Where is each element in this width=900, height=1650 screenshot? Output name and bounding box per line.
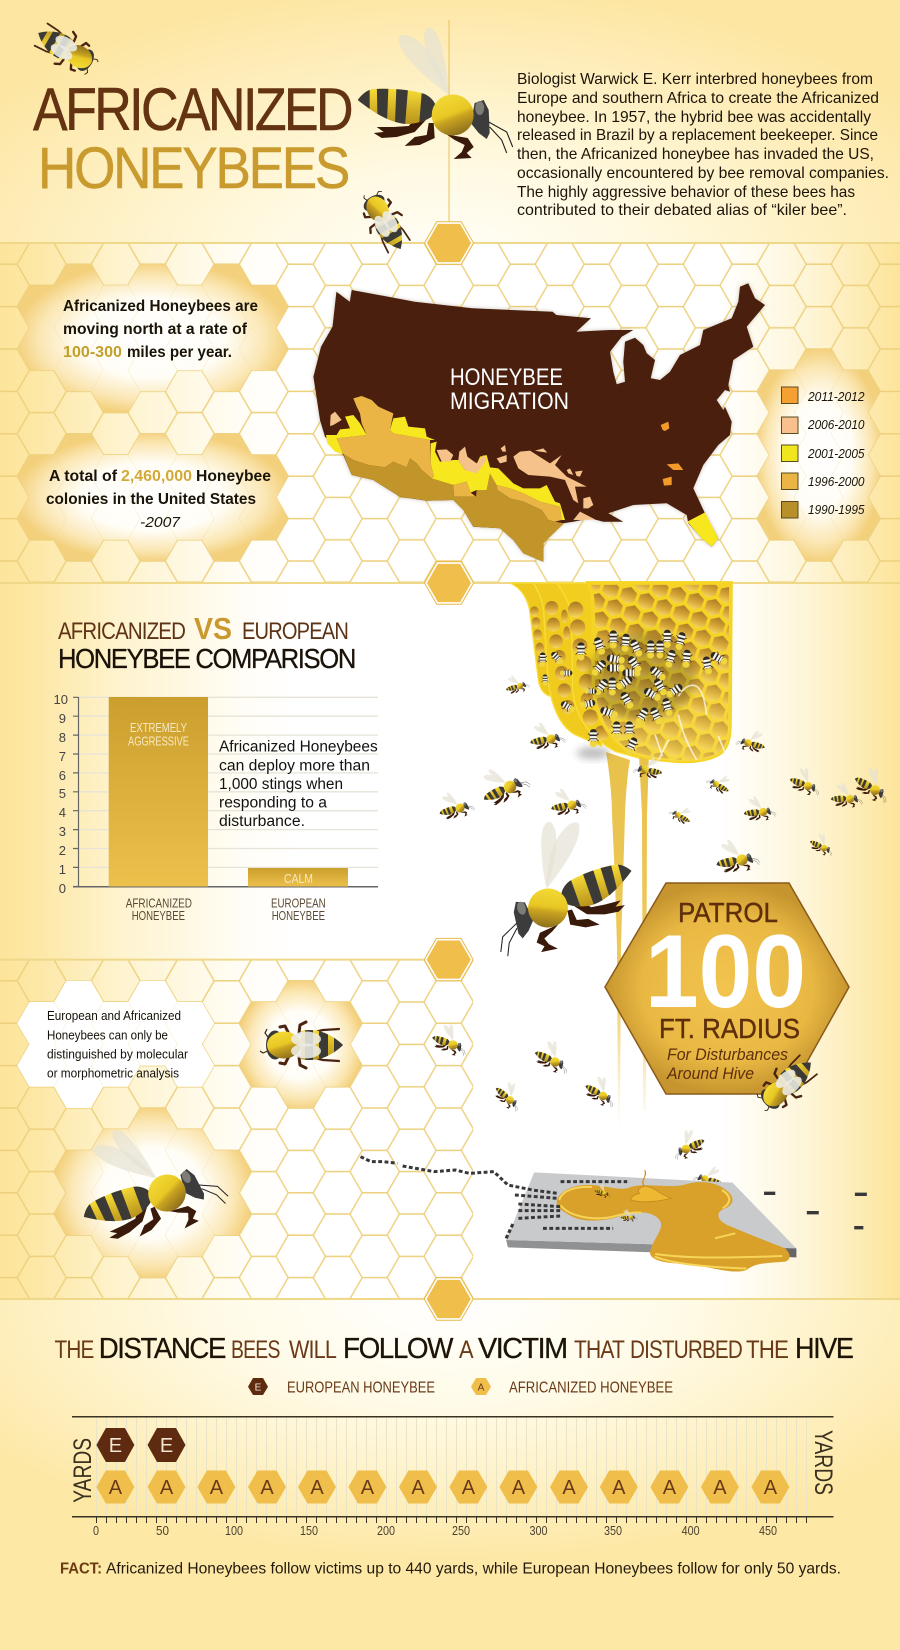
patrol badge: Around Hive bbox=[666, 1064, 754, 1083]
panel: colonies total: 2,460,000 bbox=[121, 468, 192, 485]
panel: migration rate: miles per year. bbox=[127, 344, 232, 361]
section hexagon badge: identification bbox=[424, 938, 473, 981]
map band: 2006-2010 bbox=[330, 412, 595, 520]
intro paragraph: released in Brazil by a replacement beekeeper. Since bbox=[517, 127, 878, 144]
distance heading: VICTIM bbox=[478, 1333, 567, 1365]
map band: 1996-2000 bbox=[337, 396, 562, 522]
comparison heading: AFRICANIZED bbox=[58, 618, 186, 645]
bar: Africanized: EXTREMELY bbox=[130, 721, 187, 735]
bar chart: aggression: 5 bbox=[59, 786, 66, 801]
bar chart: aggression: AFRICANIZED bbox=[126, 897, 192, 911]
map: honeybee migration: HONEYBEE bbox=[450, 364, 563, 391]
section hexagon badge: migration bbox=[424, 222, 474, 264]
legend: distance chart: A bbox=[478, 1382, 485, 1394]
intro paragraph bbox=[517, 71, 889, 219]
map band: Florida 2001-2005 bbox=[687, 512, 718, 547]
European hexagons: E bbox=[109, 1435, 122, 1457]
intro paragraph: Biologist Warwick E. Kerr interbred honeybees from bbox=[517, 71, 873, 88]
panel: identification text: Honeybees can only be bbox=[47, 1028, 168, 1042]
panel: map legend bbox=[755, 348, 883, 562]
Africanized hexagons: A bbox=[109, 1477, 123, 1499]
Africanized hexagons: A bbox=[713, 1477, 727, 1499]
hive honeycomb bbox=[510, 583, 731, 761]
distance heading: THE bbox=[746, 1336, 788, 1364]
honey drips bbox=[606, 752, 649, 1128]
distance heading: BEES bbox=[231, 1336, 280, 1364]
map band: 2001-2005 bbox=[326, 415, 565, 520]
scattered ants bbox=[764, 1193, 867, 1228]
distance heading: THAT bbox=[574, 1336, 625, 1364]
comparison heading: HONEYBEE COMPARISON bbox=[58, 643, 355, 674]
patrol badge: FT. RADIUS bbox=[659, 1013, 800, 1044]
panel: identification text: or morphometric analysis bbox=[47, 1066, 179, 1080]
Africanized hexagons: A bbox=[512, 1477, 526, 1499]
honeycomb: migration section bbox=[0, 243, 900, 583]
distance heading: A bbox=[459, 1336, 474, 1364]
title: AFRICANIZED bbox=[33, 76, 352, 143]
fact statement: FACT: bbox=[60, 1560, 102, 1577]
patrol badge: PATROL bbox=[678, 897, 778, 928]
bar chart: aggression: 6 bbox=[59, 768, 66, 783]
bar: European: CALM bbox=[284, 872, 313, 886]
intro paragraph: honeybee. In 1957, the hybrid bee was accidentally bbox=[517, 109, 871, 126]
icon: bee under title bbox=[353, 184, 417, 260]
legend: distance chart: EUROPEAN HONEYBEE bbox=[287, 1380, 435, 1397]
distance heading: FOLLOW bbox=[343, 1333, 454, 1365]
Africanized hexagons: A bbox=[612, 1477, 626, 1499]
legend: distance chart: E bbox=[255, 1382, 262, 1394]
comparison heading: VS bbox=[194, 611, 232, 646]
honey puddle bbox=[557, 1170, 790, 1272]
panel: map legend: 2011-2012 bbox=[807, 389, 865, 404]
honeycomb: lower left section bbox=[0, 960, 473, 1299]
panel: identification text: European and Africanized bbox=[47, 1009, 181, 1023]
Africanized hexagons: A bbox=[160, 1477, 174, 1499]
panel: migration rate bbox=[15, 262, 290, 414]
map band: 1990-1995 bbox=[343, 454, 564, 562]
comb layer 1 bbox=[510, 583, 555, 696]
spilled honey tray with ants bbox=[361, 1157, 867, 1272]
fact statement: Africanized Honeybees follow victims up to 440 yards, while European Honeybees follow for only 50 yards. bbox=[106, 1560, 841, 1577]
distance timeline chart bbox=[69, 1417, 837, 1538]
bar: European bbox=[248, 868, 348, 886]
axis labels bbox=[93, 1523, 777, 1538]
comparison heading bbox=[58, 611, 355, 674]
panel: colonies total: -2007 bbox=[140, 514, 181, 531]
Africanized hexagons: A bbox=[411, 1477, 425, 1499]
map outline: United States bbox=[313, 283, 765, 562]
intro paragraph: then, the Africanized honeybee has invaded the US, bbox=[517, 146, 874, 163]
panel: map legend: 2001-2005 bbox=[807, 446, 865, 461]
Africanized hexagons: A bbox=[663, 1477, 677, 1499]
axis labels: 450 bbox=[759, 1523, 777, 1538]
Africanized hexagons: A bbox=[562, 1477, 576, 1499]
axis labels: 150 bbox=[300, 1523, 318, 1538]
callout: stings: 1,000 stings when bbox=[219, 776, 343, 793]
bar chart: aggression: 1 bbox=[59, 862, 66, 877]
swarm of bees on comb bbox=[538, 630, 730, 757]
patrol badge: 100 bbox=[645, 914, 806, 1030]
axis labels: 200 bbox=[377, 1523, 395, 1538]
comparison heading: EUROPEAN bbox=[242, 618, 348, 645]
panel: identification text bbox=[15, 980, 217, 1110]
intro paragraph: occasionally encountered by bee removal companies. bbox=[517, 165, 889, 182]
distance heading: DISTURBED bbox=[630, 1336, 742, 1364]
comb layer 4 front bbox=[588, 583, 731, 761]
Africanized hexagons: A bbox=[361, 1477, 375, 1499]
section hexagon badge: distance bbox=[424, 1278, 473, 1320]
panel: side-view bee bbox=[52, 1099, 253, 1280]
patrol badge: For Disturbances bbox=[667, 1045, 788, 1064]
intro paragraph: Europe and southern Africa to create the Africanized bbox=[517, 90, 879, 107]
European hexagons bbox=[96, 1428, 186, 1462]
Africanized hexagons: A bbox=[210, 1477, 224, 1499]
callout: stings: disturbance. bbox=[219, 813, 305, 830]
panel: identification text: distinguished by molecular bbox=[47, 1047, 188, 1061]
bar chart: aggression: HONEYBEE bbox=[272, 909, 325, 923]
panel: colonies total: Honeybee bbox=[196, 468, 271, 485]
callout: stings: Africanized Honeybees bbox=[219, 739, 378, 756]
bar chart: aggression: 7 bbox=[59, 749, 66, 764]
panel: migration rate: 100-300 bbox=[63, 344, 122, 361]
background: middle sections bbox=[0, 243, 900, 1299]
intro paragraph: The highly aggressive behavior of these bees has bbox=[517, 184, 855, 201]
map band: 2011-2012 bbox=[661, 422, 683, 486]
axis labels: 400 bbox=[682, 1523, 700, 1538]
ants trail bbox=[361, 1157, 627, 1238]
Africanized hexagons: A bbox=[764, 1477, 778, 1499]
Africanized hexagons bbox=[96, 1470, 789, 1504]
patrol badge bbox=[605, 883, 849, 1094]
legend: distance chart bbox=[248, 1378, 673, 1397]
bar chart: aggression: EUROPEAN bbox=[271, 897, 326, 911]
callout: stings bbox=[219, 739, 378, 830]
panel: map legend: 1996-2000 bbox=[808, 474, 865, 489]
distance heading: THE bbox=[54, 1336, 94, 1364]
divider rules bbox=[0, 243, 900, 1299]
distance heading bbox=[54, 1333, 854, 1365]
bar chart: aggression: 8 bbox=[59, 730, 66, 745]
flying bees bbox=[429, 670, 896, 1194]
axis title right: YARDS bbox=[809, 1430, 837, 1495]
axis labels: 0 bbox=[93, 1523, 99, 1538]
panel: migration rate: moving north at a rate of bbox=[63, 321, 248, 338]
bar: Africanized bbox=[109, 697, 208, 886]
comb layer 3 bbox=[557, 583, 638, 758]
bar chart: aggression: 0 bbox=[59, 881, 66, 896]
Africanized hexagons: A bbox=[310, 1477, 324, 1499]
distance heading: WILL bbox=[289, 1336, 337, 1364]
European hexagons: E bbox=[160, 1435, 173, 1457]
bar chart: aggression: 3 bbox=[59, 824, 66, 839]
bar chart: aggression: 4 bbox=[59, 805, 66, 820]
icon: bee top-left bbox=[27, 16, 105, 82]
bar chart: aggression: 10 bbox=[54, 692, 68, 707]
map: honeybee migration: MIGRATION bbox=[450, 388, 569, 415]
panel: colonies total: colonies in the United States bbox=[46, 491, 256, 508]
icon: large header bee bbox=[353, 28, 513, 159]
panel: colonies total bbox=[15, 432, 290, 562]
axis labels: 50 bbox=[156, 1523, 169, 1538]
Africanized hexagons: A bbox=[462, 1477, 476, 1499]
vertical connector line bbox=[448, 20, 450, 222]
title bbox=[33, 76, 352, 201]
distance heading: DISTANCE bbox=[99, 1333, 226, 1365]
axis title left: YARDS bbox=[69, 1438, 97, 1503]
panel: top-view bee bbox=[238, 980, 363, 1110]
callout: stings: responding to a bbox=[219, 795, 327, 812]
distance heading: HIVE bbox=[795, 1333, 854, 1365]
background: header bbox=[0, 0, 900, 243]
section hexagon badge: comparison bbox=[424, 562, 474, 604]
background: footer bbox=[0, 1299, 900, 1650]
axis labels: 100 bbox=[225, 1523, 243, 1538]
tray bbox=[506, 1172, 796, 1257]
bar chart: aggression: 9 bbox=[59, 711, 66, 726]
panel: map legend: 2006-2010 bbox=[807, 417, 865, 432]
comb layer 2 bbox=[533, 583, 602, 746]
icon: mid-page large bee bbox=[471, 803, 651, 963]
bar chart: aggression bbox=[54, 692, 378, 923]
bar chart: aggression: HONEYBEE bbox=[132, 909, 185, 923]
map shadow bbox=[313, 283, 765, 562]
bar: Africanized: AGGRESSIVE bbox=[128, 735, 189, 749]
axis labels: 350 bbox=[604, 1523, 622, 1538]
bar chart: aggression: 2 bbox=[59, 843, 66, 858]
map: honeybee migration bbox=[313, 283, 765, 562]
callout: stings: can deploy more than bbox=[219, 758, 370, 775]
panel: migration rate: Africanized Honeybees are bbox=[63, 298, 258, 315]
panel: map legend: 1990-1995 bbox=[808, 502, 865, 517]
panel: colonies total: A total of bbox=[49, 468, 118, 485]
icon: bee on badge bbox=[749, 1047, 825, 1121]
legend: distance chart: AFRICANIZED HONEYBEE bbox=[509, 1380, 673, 1397]
title: HONEYBEES bbox=[38, 136, 349, 201]
intro paragraph: contributed to their debated alias of “kiler bee”. bbox=[517, 202, 847, 219]
axis labels: 300 bbox=[530, 1523, 548, 1538]
axis labels: 250 bbox=[452, 1523, 470, 1538]
Africanized hexagons: A bbox=[260, 1477, 274, 1499]
